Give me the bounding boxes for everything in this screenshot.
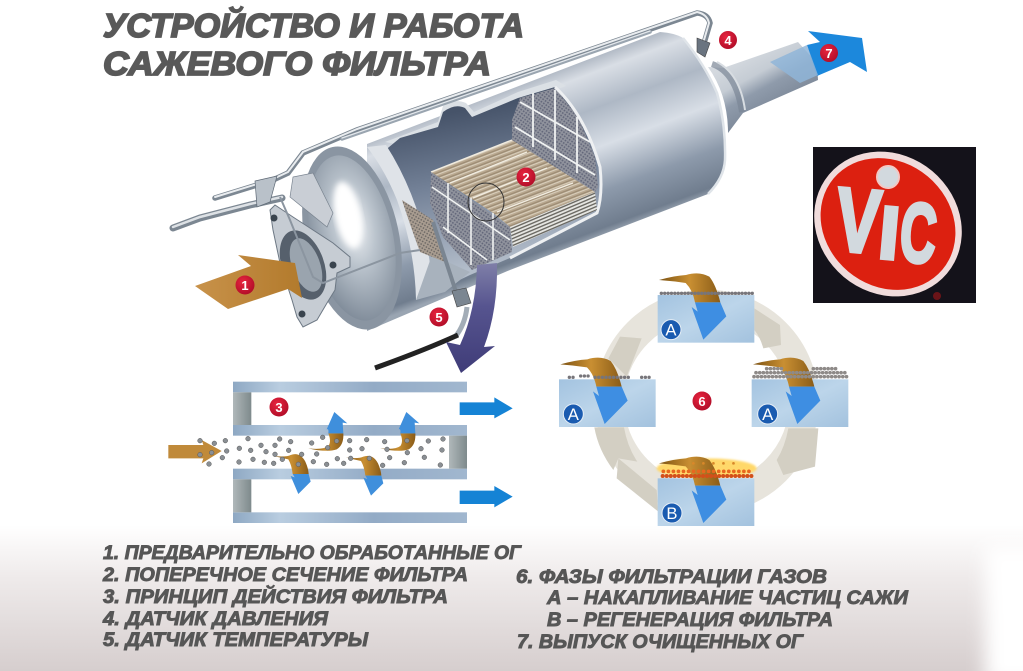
top pressure pipes (173, 12, 710, 228)
marker 6 (692, 392, 712, 410)
legend: left column (102, 543, 522, 651)
outlet pipe (708, 42, 818, 133)
phase cell: bottom regeneration (657, 457, 757, 526)
outlet arrow upper (460, 397, 513, 418)
inlet gas arrow (168, 440, 222, 463)
translucent outlet band (770, 45, 818, 83)
marker 1: 1 (241, 278, 249, 293)
filter back grid wall (512, 88, 598, 192)
marker 7 (820, 44, 838, 62)
lower mesh (402, 200, 445, 262)
filter side stripes (510, 192, 597, 247)
marker 4: 4 (724, 33, 732, 48)
channel walls (233, 382, 467, 523)
gas flow curls (273, 412, 419, 496)
exhaust flow arrow (purple) (446, 263, 497, 373)
legend: right column (516, 567, 908, 653)
circular flow ring (594, 304, 818, 512)
legend: right column: 7. ВЫПУСК ОЧИЩЕННЫХ ОГ (517, 632, 804, 653)
diagram: filter cylinder cutaway (173, 12, 867, 373)
cutaway interior (383, 87, 601, 293)
right cut rim (510, 87, 601, 258)
legend: left column: 5. ДАТЧИК ТЕМПЕРАТУРЫ (103, 630, 369, 651)
filter body (367, 32, 725, 331)
legend: right column: 6. ФАЗЫ ФИЛЬТРАЦИИ ГАЗОВ (516, 567, 827, 588)
legend: right column: В – РЕГЕНЕРАЦИЯ ФИЛЬТРА (547, 610, 833, 631)
logo: VIC (785, 122, 991, 326)
collar ring (367, 145, 434, 300)
legend: left column: 3. ПРИНЦИП ДЕЙСТВИЯ ФИЛЬТРА (103, 586, 448, 608)
filter top face (431, 140, 595, 227)
detail circle (468, 183, 504, 221)
left dome (287, 137, 417, 339)
logo: VIC: V (832, 170, 884, 273)
marker 5: 5 (435, 310, 443, 325)
phase cell: bottom regeneration: B (666, 504, 678, 523)
legend: left column: 2. ПОПЕРЕЧНОЕ СЕЧЕНИЕ ФИЛЬТРА (102, 565, 468, 586)
top cut band (385, 80, 566, 145)
lower metal shell (416, 255, 470, 300)
panel 6: filtration phases cycle (559, 273, 848, 526)
title: САЖЕВОГО ФИЛЬТРА (103, 45, 491, 82)
temperature sensor rod (375, 222, 471, 368)
filter front grid (430, 172, 512, 270)
legend: left column: 1. ПРЕДВАРИТЕЛЬНО ОБРАБОТАННЫЕ ОГ (103, 543, 522, 564)
logo: VIC: I (876, 191, 903, 275)
pressure sensor connector (697, 38, 710, 57)
marker 3: 3 (275, 400, 283, 415)
marker 1 (236, 276, 254, 294)
logo: VIC: C (896, 185, 940, 281)
legend: right column: А – НАКАПЛИВАНИЕ ЧАСТИЦ САЖИ (546, 588, 908, 609)
inlet flange (270, 173, 350, 327)
right end rim (683, 38, 725, 194)
stripe highlights (431, 140, 573, 212)
outlet arrow lower (460, 486, 513, 507)
legend: left column: 4. ДАТЧИК ДАВЛЕНИЯ (102, 609, 329, 630)
marker 2: 2 (522, 170, 530, 185)
marker 7: 7 (825, 46, 833, 61)
marker 3 (270, 398, 288, 416)
marker 5 (430, 308, 448, 326)
phase cell: left: A (568, 405, 580, 424)
soot particles (198, 435, 445, 468)
outlet arrow (807, 31, 867, 76)
phase cell: left (559, 358, 656, 427)
title (103, 6, 524, 82)
marker 2 (516, 168, 536, 186)
pipe coupling (255, 176, 277, 207)
phase cell: top: A (665, 321, 677, 340)
title: УСТРОЙСТВО И РАБОТА (103, 6, 524, 44)
phase cell: right (752, 358, 848, 427)
phase cell: right: A (762, 405, 774, 424)
marker 6: 6 (698, 394, 706, 409)
thin wire (280, 197, 420, 283)
inlet arrow (195, 255, 302, 309)
number markers (236, 31, 838, 416)
marker 4 (719, 31, 737, 49)
panel 3: filter operating principle (168, 382, 513, 523)
phase cell: top (658, 273, 754, 343)
